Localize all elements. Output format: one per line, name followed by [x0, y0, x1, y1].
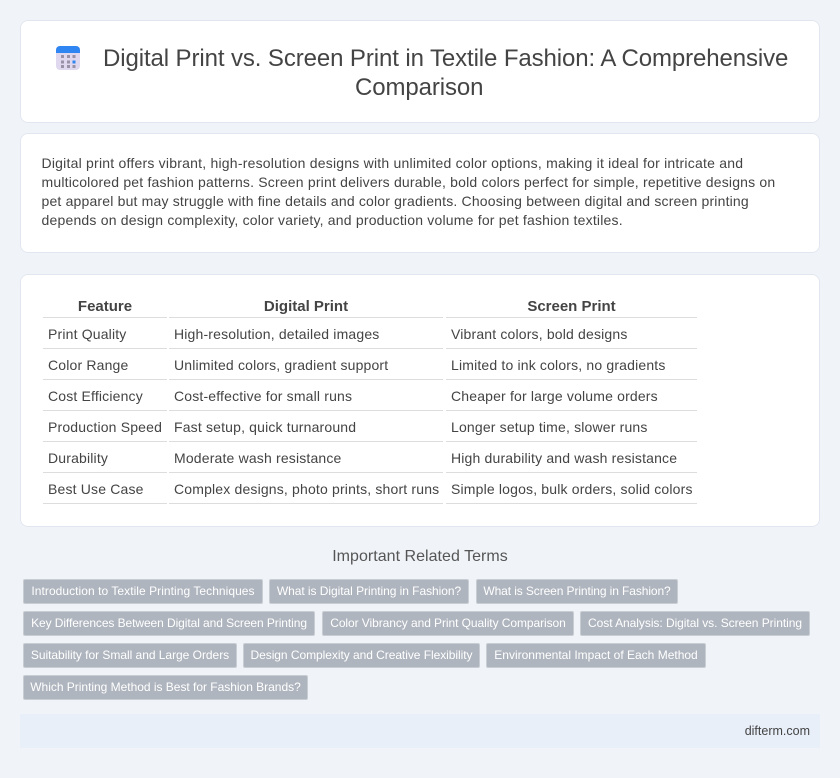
related term tags: What is Digital Printing in Fashion? [277, 584, 461, 598]
intro text: multicolored pet fashion patterns. Screen print delivers durable, bold colors perfect for simple, repetitive designs on [42, 174, 775, 190]
intro text: Digital print offers vibrant, high-resolution designs with unlimited color options, making it ideal for intricate and [42, 155, 743, 171]
related term tags: Which Printing Method is Best for Fashion Brands? [30, 680, 301, 694]
related term tags: What is Screen Printing in Fashion? [483, 584, 671, 598]
heading: related terms: Important Related Terms [332, 548, 508, 565]
table: Unlimited colors, gradient support [174, 357, 388, 373]
related term tags: Color Vibrancy and Print Quality Comparison [330, 616, 566, 630]
related term tags: Suitability for Small and Large Orders [31, 648, 229, 662]
table: Print Quality [48, 326, 126, 342]
related term tags: Introduction to Textile Printing Techniques [31, 584, 255, 598]
table: Color Range [48, 357, 128, 373]
table: Complex designs, photo prints, short runs [174, 481, 439, 497]
intro text: pet apparel but may struggle with fine details and color gradients. Choosing between digital and screen printing [42, 193, 749, 209]
title: Comparison [355, 74, 483, 101]
panel: intro [20, 133, 820, 253]
panel: title card [20, 20, 820, 123]
footer brand: difterm.com [745, 724, 810, 738]
table: Best Use Case [48, 481, 144, 497]
table [43, 298, 697, 504]
table: High durability and wash resistance [451, 450, 677, 466]
icon: calendar [56, 46, 80, 70]
table: Longer setup time, slower runs [451, 419, 648, 435]
table: Vibrant colors, bold designs [451, 326, 628, 342]
intro text: depends on design complexity, color variety, and production volume for pet fashion textiles. [42, 212, 623, 228]
related term tags [23, 579, 810, 700]
related term tags: Environmental Impact of Each Method [494, 648, 698, 662]
table: Fast setup, quick turnaround [174, 419, 356, 435]
table: Simple logos, bulk orders, solid colors [451, 481, 693, 497]
table: High-resolution, detailed images [174, 326, 379, 342]
table: Durability [48, 450, 108, 466]
title: Digital Print vs. Screen Print in Textile Fashion: A Comprehensive [103, 45, 788, 72]
table: Moderate wash resistance [174, 450, 342, 466]
table: Cost Efficiency [48, 388, 143, 404]
table: Cost-effective for small runs [174, 388, 352, 404]
table: Limited to ink colors, no gradients [451, 357, 666, 373]
table: Feature [78, 298, 132, 315]
panel: comparison table [20, 274, 820, 527]
related term tags: Cost Analysis: Digital vs. Screen Printing [588, 616, 802, 630]
table: Cheaper for large volume orders [451, 388, 658, 404]
related term tags: Key Differences Between Digital and Screen Printing [31, 616, 307, 630]
table: Screen Print [527, 298, 616, 315]
title [103, 45, 788, 101]
table: Production Speed [48, 419, 162, 435]
intro text [42, 155, 775, 228]
related term tags: Design Complexity and Creative Flexibility [250, 648, 472, 662]
table: Digital Print [264, 298, 348, 315]
footer bar [20, 714, 820, 748]
